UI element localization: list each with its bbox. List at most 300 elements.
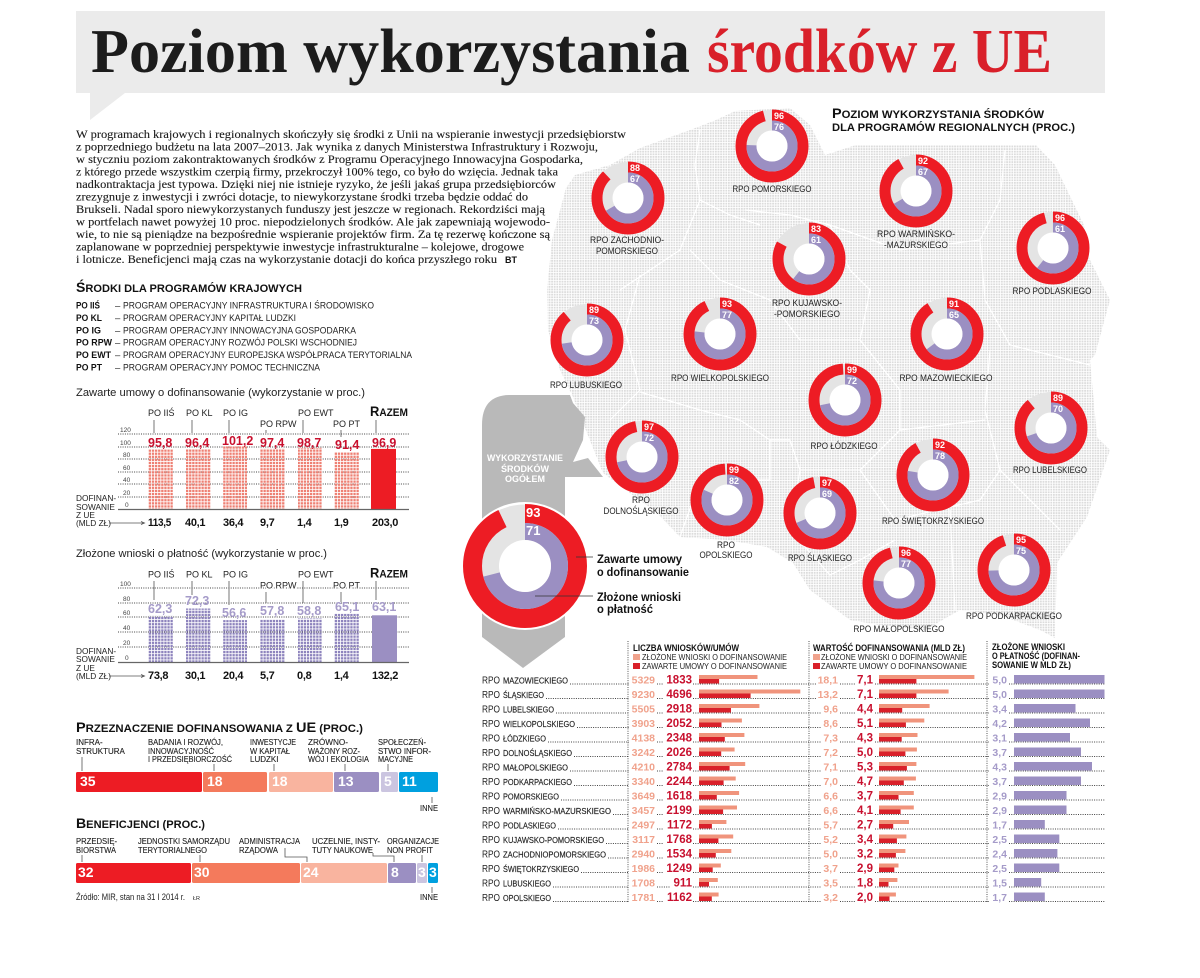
bar chart: signed contracts: PO KL — [186, 408, 213, 418]
table row: Łódzkie: RPO — [482, 734, 500, 744]
table row: Śląskie: 9230 — [632, 689, 655, 701]
bar chart: payment applications: PO EWT — [298, 570, 334, 580]
stacked bar: allocation: 11 — [402, 773, 417, 789]
table row: Lubelskie: 2918 — [666, 704, 693, 716]
table row: Opolskie: 1,7 — [992, 892, 1007, 904]
donut: total — [461, 502, 589, 630]
label: Opolskie: RPO — [717, 540, 735, 551]
label: Warmińsko-Mazurskie — [877, 229, 955, 251]
stacked bar: beneficiaries: 32 — [78, 864, 94, 880]
table column headers: WARTOŚĆ DOFINANSOWANIA (MLD ZŁ) — [813, 642, 965, 654]
callouts: donut legend: o płatność — [597, 602, 653, 616]
callouts: donut legend: Zawarte umowy — [597, 552, 682, 566]
donut: Wielkopolskie — [684, 298, 756, 370]
bar chart: payment applications: 58,8 — [297, 604, 321, 618]
table row: Lubelskie — [482, 704, 1105, 716]
table row: Świętokrzyskie: 2,5 — [992, 863, 1007, 875]
grey arrow: total funds: ŚRODKÓW — [501, 463, 550, 474]
table row: Zachodniopomorskie: 2940 — [632, 848, 655, 860]
table row: Dolnośląskie: 2026 — [666, 747, 692, 759]
programme legend: – — [115, 338, 121, 348]
bar chart: payment applications: 5,7 — [260, 670, 275, 682]
table row: Małopolskie: 2784 — [666, 762, 693, 774]
stacked bar: allocation: 13 — [338, 773, 354, 789]
donut: Podlaskie: 96 — [1055, 213, 1065, 223]
label: Dolnośląskie — [604, 495, 678, 517]
label: Kujawsko-Pomorskie: -POMORSKIEGO — [774, 309, 840, 320]
bar chart: signed contracts: SOWANIE — [76, 502, 115, 512]
table row: Kujawsko-Pomorskie: 1768 — [666, 834, 693, 846]
programme legend: – — [115, 350, 121, 361]
grey arrow: total funds: WYKORZYSTANIE — [487, 453, 563, 463]
stacked bar: beneficiaries: NON PROFIT — [387, 846, 433, 855]
table row: Małopolskie: 4,3 — [992, 762, 1007, 774]
programme legend: PROGRAM OPERACYJNY INFRASTRUKTURA I ŚRODOWISKO — [123, 300, 374, 312]
table row: Pomorskie — [482, 790, 1105, 802]
bar chart: payment applications: Z UE — [76, 663, 95, 673]
table row: Pomorskie: 2,9 — [992, 790, 1007, 802]
table row: Opolskie: OPOLSKIEGO — [503, 893, 551, 903]
table row: Zachodniopomorskie: ZACHODNIOPOMORSKIEGO — [503, 850, 606, 860]
stacked bar: allocation — [76, 738, 438, 813]
table row: Podkarpackie: RPO — [482, 777, 500, 788]
bar chart: payment applications: SOWANIE — [76, 654, 115, 664]
label: Zachodniopomorskie: RPO ZACHODNIO- — [590, 235, 664, 246]
table row: Łódzkie: 3,1 — [992, 732, 1007, 744]
bar chart: payment applications: 0,8 — [297, 670, 312, 682]
donut: Pomorskie: 96 — [774, 111, 784, 121]
table row: Opolskie: RPO — [482, 893, 500, 904]
table row: Śląskie: ŚLĄSKIEGO — [503, 689, 544, 700]
table row: Warmińsko-Mazurskie: 4,1 — [857, 805, 874, 817]
table row: Łódzkie: 2348 — [666, 732, 693, 744]
label: Wielkopolskie: RPO WIELKOPOLSKIEGO — [671, 373, 769, 384]
stacked bar: beneficiaries: TUTY NAUKOWE — [312, 846, 373, 855]
donut: Opolskie — [691, 464, 763, 536]
bar chart: signed contracts: 36,4 — [223, 517, 244, 529]
bar chart: signed contracts: 40 — [123, 477, 131, 484]
table row: Opolskie: 1781 — [632, 892, 655, 904]
table row: Opolskie: 1162 — [667, 892, 692, 904]
label: Podlaskie: RPO PODLASKIEGO — [1012, 286, 1092, 297]
programme legend: PROGRAM OPERACYJNY INNOWACYJNA GOSPODARKA — [123, 326, 357, 336]
table row: Lubuskie: 1708 — [632, 878, 655, 890]
stacked bar: allocation: INNOWACYJNOŚĆ — [148, 747, 214, 756]
intro text block: z poprzedniego budżetu na lata 2007–2013. Jak wynika z danych Ministerstwa Infrastruktury i Rozwoju, — [76, 140, 598, 154]
stacked bar: allocation: 5 — [384, 773, 392, 789]
bar chart: payment applications: 62,3 — [148, 602, 172, 616]
donut: Małopolskie — [863, 547, 935, 619]
table row: Kujawsko-Pomorskie: KUJAWSKO-POMORSKIEGO — [503, 835, 604, 845]
bar chart: signed contracts: 1,9 — [334, 517, 349, 529]
bar chart: signed contracts: 95,8 — [148, 436, 172, 450]
intro text block: w styczniu poziom zakontraktowanych środków z Programu Operacyjnego Innowacyjna Gospodarka, — [76, 152, 583, 166]
bar chart: signed contracts: 1,4 — [297, 517, 313, 529]
programme legend: PO KL — [76, 313, 102, 324]
donut: total: 71 — [526, 523, 540, 538]
table row: Wielkopolskie: 4,2 — [992, 718, 1007, 730]
programme legend: PO RPW — [76, 338, 112, 348]
table row: Lubelskie: 5505 — [632, 704, 655, 716]
bar chart: signed contracts: 96,9 — [372, 436, 396, 450]
programme legend: – — [115, 313, 121, 324]
stacked bar: allocation: ZRÓWNO- — [308, 738, 348, 747]
table row: Wielkopolskie: 2052 — [666, 718, 692, 730]
donut: Podlaskie — [1017, 212, 1089, 284]
donut: Łódzkie: 99 — [847, 365, 857, 375]
stacked bar: beneficiaries: RZĄDOWA — [239, 846, 279, 855]
table row: Warmińsko-Mazurskie: 2,9 — [992, 805, 1007, 817]
donut: Pomorskie: 76 — [774, 122, 784, 132]
table row: Mazowieckie: RPO — [482, 676, 500, 686]
table row: Świętokrzyskie: 1986 — [632, 863, 655, 875]
stacked bar: allocation: W KAPITAŁ — [250, 747, 291, 756]
stacked bar: beneficiaries — [76, 837, 439, 902]
bar chart: payment applications: 30,1 — [185, 670, 205, 682]
donut: Wielkopolskie: 93 — [722, 299, 732, 309]
bar chart: signed contracts: 101,2 — [222, 434, 253, 448]
table row: Warmińsko-Mazurskie — [482, 805, 1105, 817]
stacked bar: allocation: INWESTYCJE — [250, 738, 296, 747]
stacked bar: beneficiaries: INNE — [420, 893, 438, 902]
label: Warmińsko-Mazurskie: -MAZURSKIEGO — [884, 240, 948, 251]
donut: Lubuskie: 73 — [589, 316, 599, 326]
bar chart: payment applications: 72,3 — [185, 594, 209, 608]
label: Mazowieckie: RPO MAZOWIECKIEGO — [900, 373, 992, 384]
table row: Wielkopolskie: 8,6 — [823, 718, 838, 730]
table column headers: ZŁOŻONE WNIOSKI — [992, 642, 1065, 652]
bar chart: payment applications: 57,8 — [260, 604, 284, 618]
donut: Lubuskie — [551, 304, 623, 376]
stacked bar: beneficiaries: UCZELNIE, INSTY- — [312, 837, 380, 846]
table row: Warmińsko-Mazurskie: WARMIŃSKO-MAZURSKIEGO — [503, 806, 611, 816]
label: Kujawsko-Pomorskie — [772, 298, 842, 320]
label: Małopolskie: RPO MAŁOPOLSKIEGO — [854, 624, 944, 635]
donut: Kujawsko-Pomorskie: 61 — [811, 235, 821, 245]
label: Śląskie: RPO ŚLĄSKIEGO — [788, 552, 852, 564]
table column headers: ZAWARTE UMOWY O DOFINANSOWANIE — [821, 661, 967, 671]
table row: Dolnośląskie: 7,2 — [823, 747, 838, 759]
table row: Warmińsko-Mazurskie: RPO — [482, 806, 500, 817]
bar chart: signed contracts: 60 — [123, 465, 131, 472]
table row: Podlaskie: RPO — [482, 820, 500, 832]
table row: Podkarpackie: 4,7 — [857, 776, 873, 788]
bar chart: payment applications: 40 — [123, 625, 131, 632]
bar chart: payment applications: PO IIŚ — [148, 568, 175, 580]
table column headers: O PŁATNOŚĆ (DOFINAN- — [992, 650, 1080, 661]
callouts: donut legend: o dofinansowanie — [597, 565, 689, 579]
title banner — [76, 11, 1105, 120]
table row: Lubuskie: LUBUSKIEGO — [503, 878, 551, 888]
bar chart: signed contracts: Z UE — [76, 510, 95, 520]
table row: Łódzkie — [482, 732, 1105, 744]
label: Lubelskie: RPO LUBELSKIEGO — [1013, 465, 1087, 476]
programme legend: PO IIŚ — [76, 300, 100, 312]
table row: Małopolskie: 4210 — [632, 762, 655, 774]
bar chart: signed contracts: 100 — [120, 440, 131, 447]
donut: Świętokrzyskie: 78 — [935, 451, 945, 461]
table row: Małopolskie: RPO — [482, 762, 500, 774]
intro text block: zrezygnuje z inwestycji i zwróci dotacje, to niewykorzystane środki trzeba będzie oddać do — [76, 190, 528, 204]
bar chart: signed contracts: 91,4 — [335, 438, 359, 452]
table row: Kujawsko-Pomorskie: 2,5 — [992, 834, 1007, 846]
intro text block: Brukseli. Nadal sporo niewykorzystanych funduszy jest jeszcze w regionach. Rekordziści mają — [76, 202, 546, 216]
donut: Pomorskie — [736, 110, 808, 182]
bar chart: payment applications: (MLD ZŁ) — [76, 671, 111, 681]
bar chart: signed contracts: 0 — [125, 502, 129, 509]
intro text block: wie, to nie są pieniądze na bezpośrednie wspieranie projektów firm. Za tę rezerwę kończone są — [76, 227, 551, 241]
intro text block: BT — [505, 255, 517, 265]
table row: Opolskie: 3,2 — [823, 892, 838, 904]
table row: Podkarpackie — [482, 776, 1105, 788]
bar chart: signed contracts: RAZEM — [370, 403, 408, 419]
donut: Dolnośląskie — [606, 421, 678, 493]
donut: Opolskie: 82 — [729, 476, 739, 486]
programme legend: PROGRAM OPERACYJNY POMOC TECHNICZNA — [123, 362, 321, 374]
stacked bar: beneficiaries: JEDNOSTKI SAMORZĄDU — [138, 837, 230, 846]
map title — [832, 105, 1075, 134]
table row: Podlaskie: 1172 — [667, 820, 692, 832]
table row: Mazowieckie: 18,1 — [818, 674, 838, 686]
table row: Warmińsko-Mazurskie: 3457 — [632, 805, 655, 817]
stacked bar: allocation: STRUKTURA — [76, 747, 126, 756]
table row: Lubuskie: 1,8 — [857, 878, 874, 890]
stacked bar: beneficiaries: ORGANIZACJE — [387, 837, 439, 846]
intro text block — [76, 127, 626, 266]
bar chart: signed contracts: 203,0 — [372, 517, 398, 529]
donut: Mazowieckie: 91 — [949, 299, 959, 309]
table row: Kujawsko-Pomorskie: RPO — [482, 835, 500, 846]
donut: total: 93 — [526, 505, 540, 520]
table row: Śląskie — [482, 689, 1105, 701]
table row: Lubuskie: RPO — [482, 878, 500, 890]
bar chart: signed contracts: 9,7 — [260, 517, 275, 529]
donut: Zachodniopomorskie: 88 — [630, 163, 640, 173]
table row: Dolnośląskie: 3,7 — [992, 747, 1007, 759]
label: Warmińsko-Mazurskie: RPO WARMIŃSKO- — [877, 229, 955, 240]
table row: Podkarpackie: 3340 — [632, 776, 655, 788]
map title: POZIOM WYKORZYSTANIA ŚRODKÓW — [832, 105, 1045, 121]
label: Podkarpackie: RPO PODKARPACKIEGO — [966, 611, 1062, 622]
label: Dolnośląskie: DOLNOŚLĄSKIEGO — [604, 505, 678, 517]
table row: Podkarpackie: 3,7 — [992, 776, 1007, 788]
table row: Świętokrzyskie: ŚWIĘTOKRZYSKIEGO — [503, 863, 579, 874]
intro text block: zaplanowane w poprzedniej perspektywie inwestycje infrastrukturalne – kolejowe, drogowe — [76, 240, 524, 254]
table row: Małopolskie: 7,1 — [823, 762, 838, 774]
donut: Warmińsko-Mazurskie: 92 — [918, 156, 928, 166]
label: Dolnośląskie: RPO — [632, 495, 650, 506]
label: Pomorskie: RPO POMORSKIEGO — [732, 184, 812, 195]
stacked bar: beneficiaries: ADMINISTRACJA — [239, 837, 301, 846]
donut: Podkarpackie — [978, 534, 1050, 606]
bar chart: signed contracts: 40,1 — [185, 517, 205, 529]
table row: Zachodniopomorskie: 1534 — [666, 848, 693, 860]
table row: Łódzkie: ŁÓDZKIEGO — [503, 734, 546, 744]
table row: Świętokrzyskie: RPO — [482, 864, 500, 875]
grey arrow: total funds: OGÓŁEM — [505, 473, 545, 484]
table row: Podlaskie: PODLASKIEGO — [503, 820, 556, 830]
table row: Zachodniopomorskie: 2,4 — [992, 848, 1007, 860]
bar chart: signed contracts: PO PT — [333, 419, 361, 429]
donut: Dolnośląskie: 72 — [644, 433, 654, 443]
donut: Zachodniopomorskie — [592, 162, 664, 234]
label: Łódzkie: RPO ŁÓDZKIEGO — [810, 441, 878, 452]
stacked bar: beneficiaries: 8 — [391, 864, 399, 880]
table row: Lubuskie: 1,5 — [992, 878, 1007, 890]
table row: Dolnośląskie — [482, 747, 1105, 759]
bar chart: payment applications: 80 — [123, 596, 131, 603]
map of Poland — [547, 108, 1110, 638]
label: Lubuskie: RPO LUBUSKIEGO — [550, 380, 622, 391]
donut: Kujawsko-Pomorskie — [773, 223, 845, 295]
table row: Świętokrzyskie — [482, 863, 1105, 875]
heading: beneficiaries: BENEFICJENCI (PROC.) — [76, 815, 205, 831]
table row: Podkarpackie: PODKARPACKIEGO — [503, 777, 572, 787]
bar chart: payment applications: 20,4 — [223, 670, 244, 682]
table column headers — [628, 641, 1080, 903]
donut: Zachodniopomorskie: 67 — [630, 174, 640, 184]
table row: Łódzkie: 4138 — [632, 732, 655, 744]
table row: Opolskie: 2,0 — [857, 892, 873, 904]
table row: Łódzkie: 4,3 — [857, 732, 873, 744]
label: Opolskie: OPOLSKIEGO — [700, 550, 752, 561]
table column headers: ZAWARTE UMOWY O DOFINANSOWANIE — [642, 661, 787, 671]
programme legend: PO EWT — [76, 350, 111, 361]
table row: Mazowieckie: MAZOWIECKIEGO — [503, 676, 568, 686]
bar chart: signed contracts: (MLD ZŁ) — [76, 518, 111, 528]
donut: Małopolskie: 77 — [901, 559, 911, 569]
table row: Śląskie: 7,1 — [857, 689, 874, 701]
table row: Podlaskie: 2,7 — [857, 820, 873, 832]
donut: Śląskie — [784, 477, 856, 549]
title banner: Poziom wykorzystania — [91, 18, 690, 86]
intro text block: i lotnicze. Beneficjenci mają czas na wykorzystanie dotacji do końca przyszłego roku — [76, 252, 497, 266]
programme legend: PO PT — [76, 362, 102, 374]
grey arrow: total funds — [482, 395, 603, 668]
donut: Śląskie: 97 — [822, 478, 832, 488]
donut: Małopolskie: 96 — [901, 548, 911, 558]
stacked bar: beneficiaries: PRZEDSIĘ- — [76, 837, 117, 846]
table row: Śląskie: RPO — [482, 690, 500, 701]
programme legend: PROGRAM OPERACYJNY EUROPEJSKA WSPÓŁPRACA TERYTORIALNA — [123, 350, 413, 361]
callouts: donut legend: Złożone wnioski — [597, 590, 681, 604]
bar chart: signed contracts: 113,5 — [148, 517, 171, 529]
bar chart: payment applications: 100 — [120, 581, 131, 588]
donut: Łódzkie: 72 — [847, 376, 857, 386]
table row: Lubelskie: 4,4 — [857, 704, 874, 716]
donut: Łódzkie — [809, 364, 881, 436]
title banner: środków z UE — [707, 18, 1052, 86]
table row: Podlaskie: 2497 — [632, 820, 655, 832]
table row: Łódzkie: 7,3 — [823, 732, 838, 744]
table row: Zachodniopomorskie: RPO — [482, 850, 500, 860]
donut: Warmińsko-Mazurskie: 67 — [918, 167, 928, 177]
intro text block: W programach krajowych i regionalnych skończyły się środki z Unii na wspieranie inwestycji przedsiębiorstw — [76, 127, 626, 141]
table row: Pomorskie: RPO — [482, 792, 500, 802]
table row: Lubelskie: 9,6 — [823, 704, 838, 716]
bar chart: signed contracts: 80 — [123, 452, 131, 459]
stacked bar: allocation: WÓJ I EKOLOGIA — [308, 755, 370, 764]
table row: Podlaskie: 5,7 — [823, 820, 838, 832]
table row: Pomorskie: 3,7 — [857, 790, 873, 802]
heading: payment chart: Złożone wnioski o płatność (wykorzystanie w proc.) — [76, 548, 327, 560]
donut: Świętokrzyskie: 92 — [935, 440, 945, 450]
programme legend: – — [115, 326, 121, 336]
heading: national programmes: ŚRODKI DLA PROGRAMÓW KRAJOWYCH — [76, 278, 302, 295]
table column headers: ZŁOŻONE WNIOSKI O DOFINANSOWANIE — [642, 652, 787, 662]
heading: contracts chart: Zawarte umowy o dofinansowanie (wykorzystanie w proc.) — [76, 387, 365, 399]
table row: Kujawsko-Pomorskie: 3,4 — [857, 834, 874, 846]
programme legend: PROGRAM OPERACYJNY ROZWÓJ POLSKI WSCHODNIEJ — [123, 338, 357, 348]
table row: Świętokrzyskie: 1249 — [666, 863, 692, 875]
table row: Warmińsko-Mazurskie: 6,6 — [823, 805, 838, 817]
source note: Źródło: MIR, stan na 31 I 2014 r. — [76, 892, 185, 903]
bar chart: payment applications: 60 — [123, 610, 131, 617]
bar chart: signed contracts: PO RPW — [260, 419, 297, 429]
donut: Śląskie: 69 — [822, 489, 832, 499]
table row: Podlaskie: 1,7 — [992, 820, 1007, 832]
table row: Śląskie: 5,0 — [992, 689, 1007, 701]
table row: Pomorskie: 3649 — [632, 790, 655, 802]
table row: Zachodniopomorskie: 3,2 — [857, 848, 873, 860]
stacked bar: allocation: WAŻONY ROZ- — [308, 747, 360, 756]
stacked bar: allocation: BADANIA I ROZWÓJ, — [148, 738, 223, 747]
table row: Śląskie: 13,2 — [818, 689, 838, 701]
donut: Warmińsko-Mazurskie — [880, 155, 952, 227]
table row: Pomorskie: POMORSKIEGO — [503, 792, 559, 802]
table row: Lubelskie: 3,4 — [992, 704, 1007, 716]
table column headers: ZŁOŻONE WNIOSKI O DOFINANSOWANIE — [821, 652, 967, 662]
table row: Dolnośląskie: 3242 — [632, 747, 655, 759]
table row: Dolnośląskie: DOLNOŚLĄSKIEGO — [503, 747, 572, 758]
label: Opolskie — [700, 540, 752, 561]
donut: Lubuskie: 89 — [589, 305, 599, 315]
bar chart: signed contracts: DOFINAN- — [76, 493, 116, 503]
table row: Podlaskie — [482, 820, 1105, 832]
label: Zachodniopomorskie — [590, 235, 664, 257]
donut: Opolskie: 99 — [729, 465, 739, 475]
bar chart: payment applications: 0 — [125, 655, 129, 662]
table row: Zachodniopomorskie: 5,0 — [823, 848, 838, 860]
bar chart: signed contracts: PO EWT — [298, 408, 334, 418]
stacked bar: beneficiaries: BIORSTWA — [76, 846, 117, 855]
bar chart: payment applications: 73,8 — [148, 670, 168, 682]
stacked bar: allocation: 18 — [207, 773, 223, 789]
table row: Wielkopolskie — [482, 718, 1105, 730]
donut: Mazowieckie — [911, 298, 983, 370]
table row: Kujawsko-Pomorskie: 5,2 — [823, 834, 838, 846]
table row: Podkarpackie: 2244 — [666, 776, 693, 788]
table row: Śląskie: 4696 — [666, 689, 692, 701]
donut: Podlaskie: 61 — [1055, 224, 1065, 234]
table row: Wielkopolskie: 5,1 — [857, 718, 874, 730]
donut: Świętokrzyskie — [897, 439, 969, 511]
table row: Kujawsko-Pomorskie — [482, 834, 1105, 846]
table row: Dolnośląskie: RPO — [482, 748, 500, 759]
programme legend — [76, 300, 413, 374]
bar chart: payment applications: 20 — [123, 640, 131, 647]
bar chart: payment applications: PO IG — [223, 570, 248, 580]
stacked bar: allocation: STWO INFOR- — [378, 747, 431, 756]
bar chart: payment applications — [76, 564, 409, 682]
table row: Małopolskie — [482, 762, 1105, 774]
stacked bar: allocation: MACYJNE — [378, 755, 413, 764]
programme legend: – — [115, 362, 121, 374]
bar chart: signed contracts: PO IG — [223, 408, 248, 418]
stacked bar: allocation: INFRA- — [76, 738, 103, 747]
label: Zachodniopomorskie: POMORSKIEGO — [596, 246, 658, 257]
bar chart: signed contracts — [76, 403, 409, 529]
